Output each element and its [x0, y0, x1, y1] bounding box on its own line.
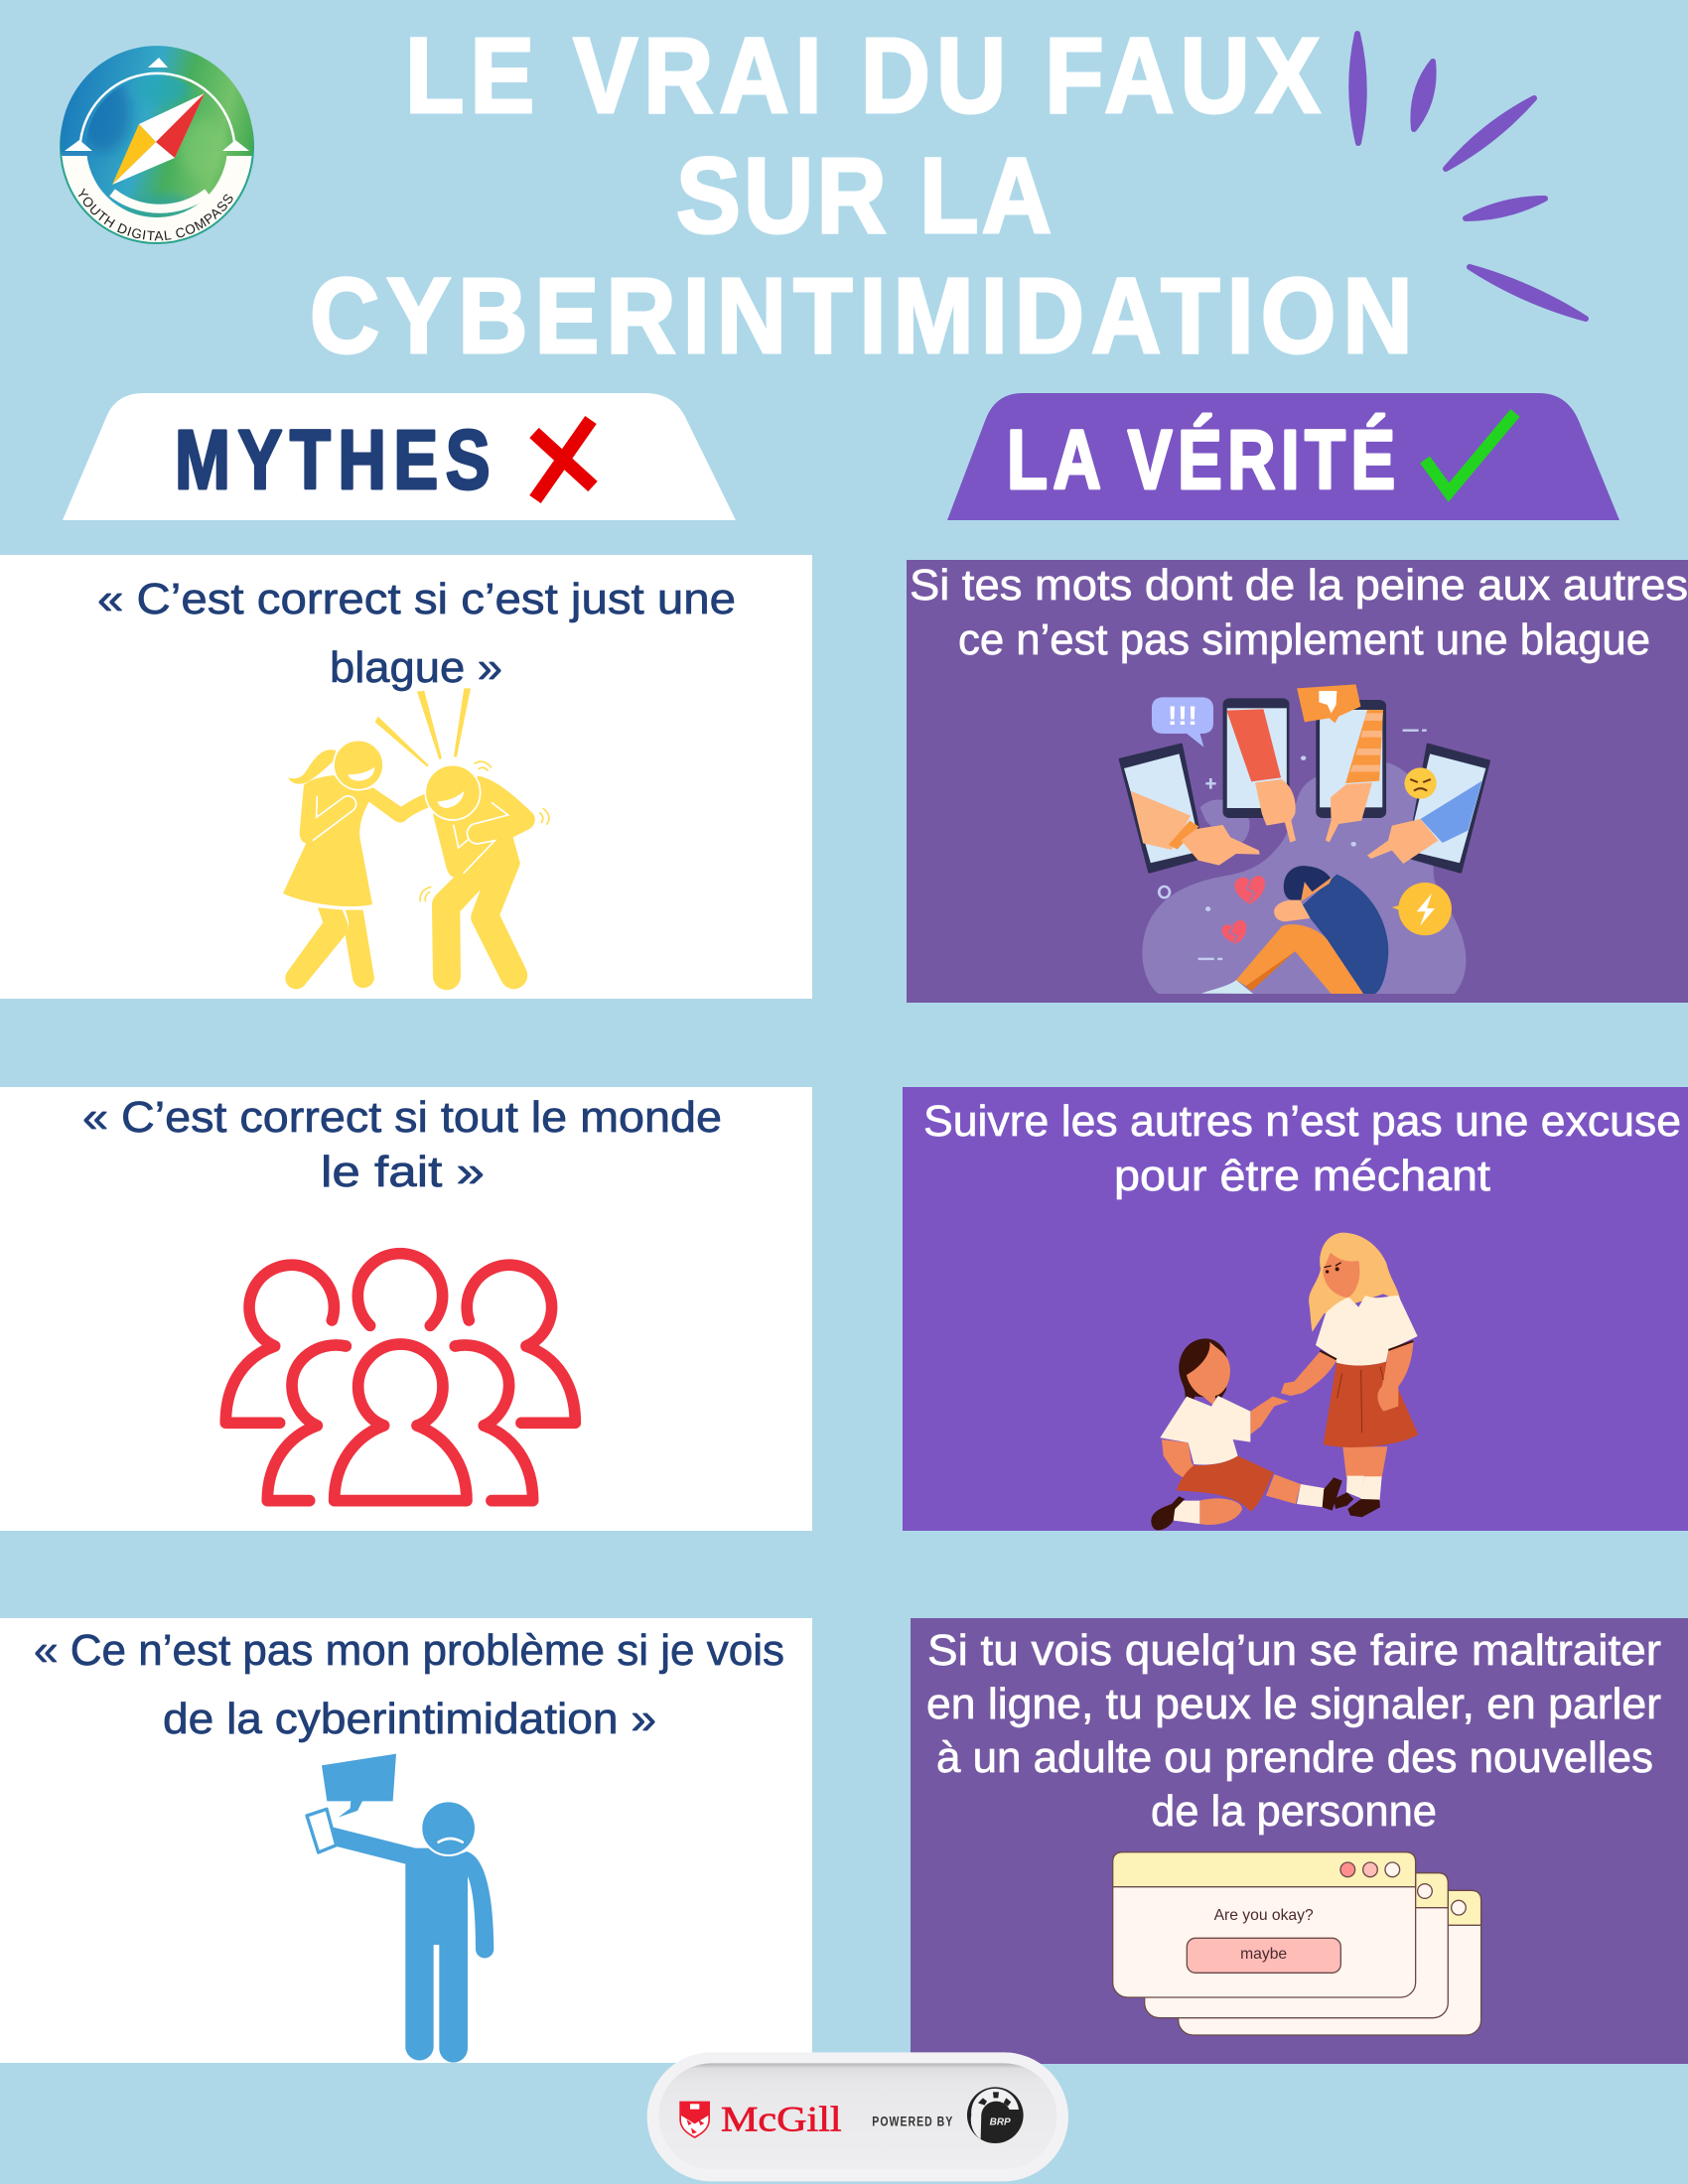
bubble: lightning	[1392, 883, 1452, 935]
text: myth 3: « Ce n’est pas mon problème si je vois	[34, 1626, 784, 1675]
figure: standing girl	[1281, 1233, 1418, 1517]
heading tab: la vérité: LA VÉRITÉ	[1007, 414, 1395, 507]
window: front dialog	[1113, 1852, 1416, 1997]
panel: truth 2	[903, 1087, 1688, 1531]
panel: myth 3	[0, 1618, 812, 2063]
text: myth 1: blague »	[330, 643, 502, 692]
logo: BRP: BRP	[990, 2117, 1011, 2128]
icon: group of people outline	[225, 1254, 575, 1501]
text: myth 2: « C’est correct si tout le monde	[82, 1093, 722, 1142]
logo: BRP	[967, 2087, 1024, 2143]
phone: right	[1367, 745, 1488, 872]
text: truth 1	[910, 561, 1688, 664]
text: myth 3	[34, 1626, 784, 1743]
logo: McGill	[679, 2100, 842, 2139]
logo: McGill: McGill	[721, 2100, 842, 2139]
illustration: girl helping another girl up	[1151, 1233, 1418, 1530]
icons: broken hearts	[1221, 876, 1265, 944]
text: myth 2: le fait »	[321, 1148, 485, 1196]
logo: Youth Digital Compass: YOUTH DIGITAL COMPASS	[77, 188, 232, 240]
emoji: angry face	[1404, 767, 1437, 799]
icon: two laughing figures	[283, 688, 549, 990]
title: CYBERINTIMIDATION	[310, 255, 1413, 375]
figure: sitting girl	[1151, 1338, 1342, 1530]
heading tab: mythes	[63, 393, 736, 520]
title	[310, 15, 1413, 375]
panel: truth 1	[907, 560, 1688, 1003]
text: myth 2	[82, 1093, 722, 1196]
text: truth 1: Si tes mots dont de la peine aux autres	[910, 561, 1688, 610]
text: truth 3: en ligne, tu peux le signaler, en parler	[926, 1680, 1661, 1728]
icon: sad figure with phone	[307, 1754, 493, 2063]
text: truth 2	[923, 1097, 1681, 1200]
text: truth 1: ce n’est pas simplement une blague	[958, 615, 1650, 664]
icon: red cross	[534, 420, 593, 499]
panel: truth 3	[911, 1618, 1688, 2064]
phone: left	[1120, 745, 1260, 872]
window: front dialog: Are you okay?	[1214, 1907, 1314, 1924]
figure: sad child	[1201, 866, 1388, 994]
text: myth 1	[97, 575, 736, 692]
phone: third	[1297, 684, 1386, 842]
text: truth 3	[926, 1626, 1661, 1836]
text: truth 3: Si tu vois quelq’un se faire maltraiter	[927, 1626, 1661, 1675]
text: myth 1: « C’est correct si c’est just une	[97, 575, 736, 623]
illustration: pop-up windows	[1113, 1852, 1481, 2035]
text: powered by: POWERED BY	[872, 2114, 953, 2129]
decorative purple burst	[1351, 34, 1586, 319]
heading tab: la vérité	[947, 393, 1619, 520]
bubble: exclamation: !!!	[1168, 702, 1197, 731]
icon: green check	[1425, 413, 1515, 492]
logo: Youth Digital Compass	[60, 46, 254, 244]
text: truth 3: de la personne	[1151, 1787, 1437, 1836]
text: truth 2: Suivre les autres n’est pas une excuse	[923, 1097, 1681, 1146]
panel: myth 1	[0, 555, 812, 999]
title: SUR LA	[676, 135, 1052, 255]
illustration: phones pointing at a sad child	[1120, 684, 1488, 994]
phone: second	[1223, 698, 1296, 843]
footer badge: McGill powered by BRP	[647, 2052, 1068, 2181]
heading tab: mythes: MYTHES	[175, 414, 491, 507]
text: truth 3: à un adulte ou prendre des nouvelles	[936, 1733, 1653, 1782]
panel: myth 2	[0, 1087, 812, 1531]
text: truth 2: pour être méchant	[1114, 1152, 1490, 1200]
bubble: exclamation	[1152, 697, 1213, 748]
text: myth 3: de la cyberintimidation »	[163, 1695, 656, 1743]
title: LE VRAI DU FAUX	[405, 15, 1321, 135]
window: front dialog: maybe	[1240, 1946, 1287, 1963]
